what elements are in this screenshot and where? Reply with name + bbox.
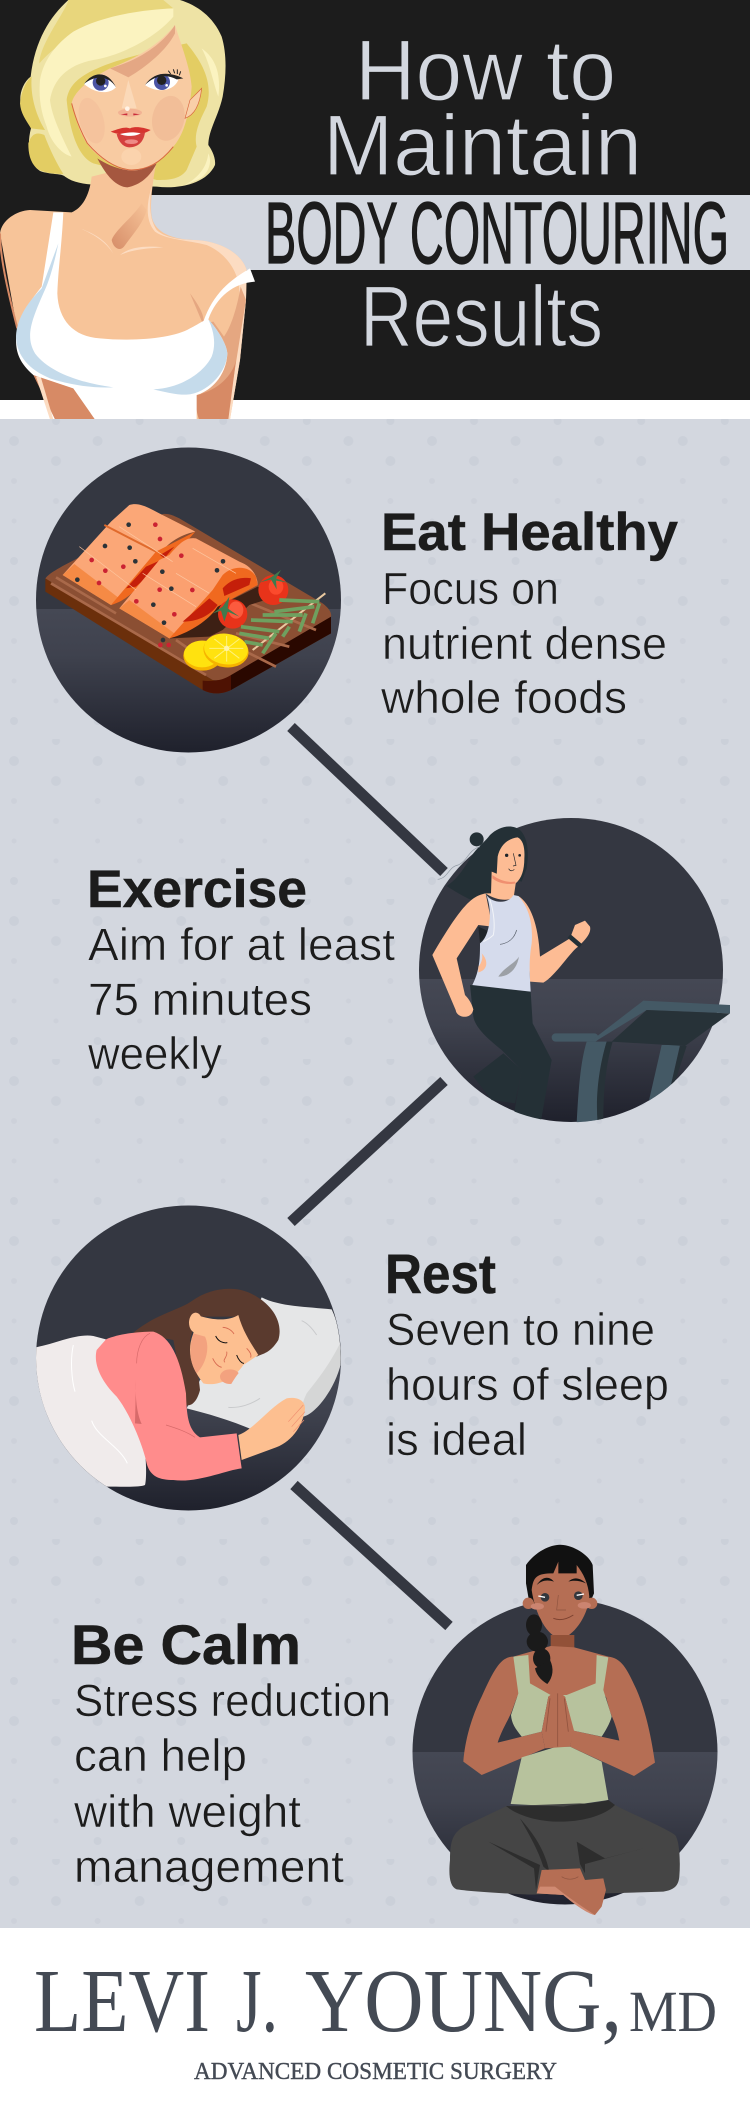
white tank top: [16, 212, 227, 419]
face and neck: [486, 872, 516, 900]
lemon slices: [183, 641, 222, 671]
title: [265, 23, 729, 365]
step 3: rest text: [385, 1242, 669, 1465]
lips: [111, 127, 151, 135]
peppercorns: [89, 522, 195, 647]
logo footer: YOUNG,: [305, 1952, 622, 2051]
step 2: exercise circle: [419, 818, 730, 1127]
connector lines: [291, 727, 449, 1626]
step 1: eat healthy text: whole foods: [380, 672, 627, 723]
step 4: be calm circle: [412, 1545, 718, 1915]
step 4: be calm text: [71, 1613, 391, 1892]
step 4: be calm text: can help: [74, 1730, 247, 1781]
illustration: meditating woman: [449, 1545, 680, 1915]
step 2: exercise text: Aim for at least: [88, 919, 396, 970]
logo footer: LEVI: [34, 1952, 210, 2051]
illustration: sleeping woman: [30, 1289, 342, 1487]
hair: [447, 826, 528, 902]
step 3: rest text: hours of sleep: [386, 1359, 669, 1410]
step 1: eat healthy text: [380, 503, 679, 723]
step 2: exercise text: [87, 860, 396, 1079]
step 3: rest text: Rest: [385, 1242, 496, 1305]
step 3: rest text: Seven to nine: [386, 1304, 655, 1355]
step 3: rest circle: [30, 1206, 342, 1510]
logo footer: MD: [629, 1979, 717, 2044]
face: [72, 25, 192, 170]
step 1: eat healthy text: Eat Healthy: [381, 503, 679, 562]
step 4: be calm text: Stress reduction: [74, 1675, 391, 1726]
step 1: eat healthy text: nutrient dense: [382, 618, 667, 669]
logo footer: [34, 1952, 717, 2085]
braid: [526, 1614, 553, 1684]
step 4: be calm text: management: [74, 1841, 345, 1892]
rosemary: [253, 593, 325, 650]
header panel: [0, 0, 750, 419]
title: Maintain: [323, 98, 642, 194]
step 2: exercise text: Exercise: [87, 860, 307, 919]
step 2: exercise text: weekly: [87, 1028, 222, 1079]
illustration: blonde woman: [0, 0, 255, 419]
step 1: eat healthy circle: [36, 448, 341, 752]
title: Results: [360, 269, 603, 365]
step 2: exercise text: 75 minutes: [88, 974, 312, 1025]
illustration: salmon board: [45, 504, 331, 693]
step 4: be calm text: Be Calm: [71, 1613, 301, 1676]
eyes: [84, 75, 116, 92]
salmon fillets: [63, 504, 195, 605]
title: How to: [355, 23, 616, 119]
logo footer: J.: [236, 1952, 278, 2051]
tomatoes: [258, 575, 288, 605]
neck and torso: [0, 160, 247, 419]
step 4: be calm text: with weight: [73, 1786, 302, 1837]
logo footer: ADVANCED COSMETIC SURGERY: [194, 2059, 557, 2085]
illustration: woman on treadmill: [432, 826, 730, 1127]
step 1: eat healthy text: Focus on: [382, 563, 559, 614]
step 3: rest text: is ideal: [386, 1414, 527, 1465]
body background panel: [0, 419, 750, 1928]
